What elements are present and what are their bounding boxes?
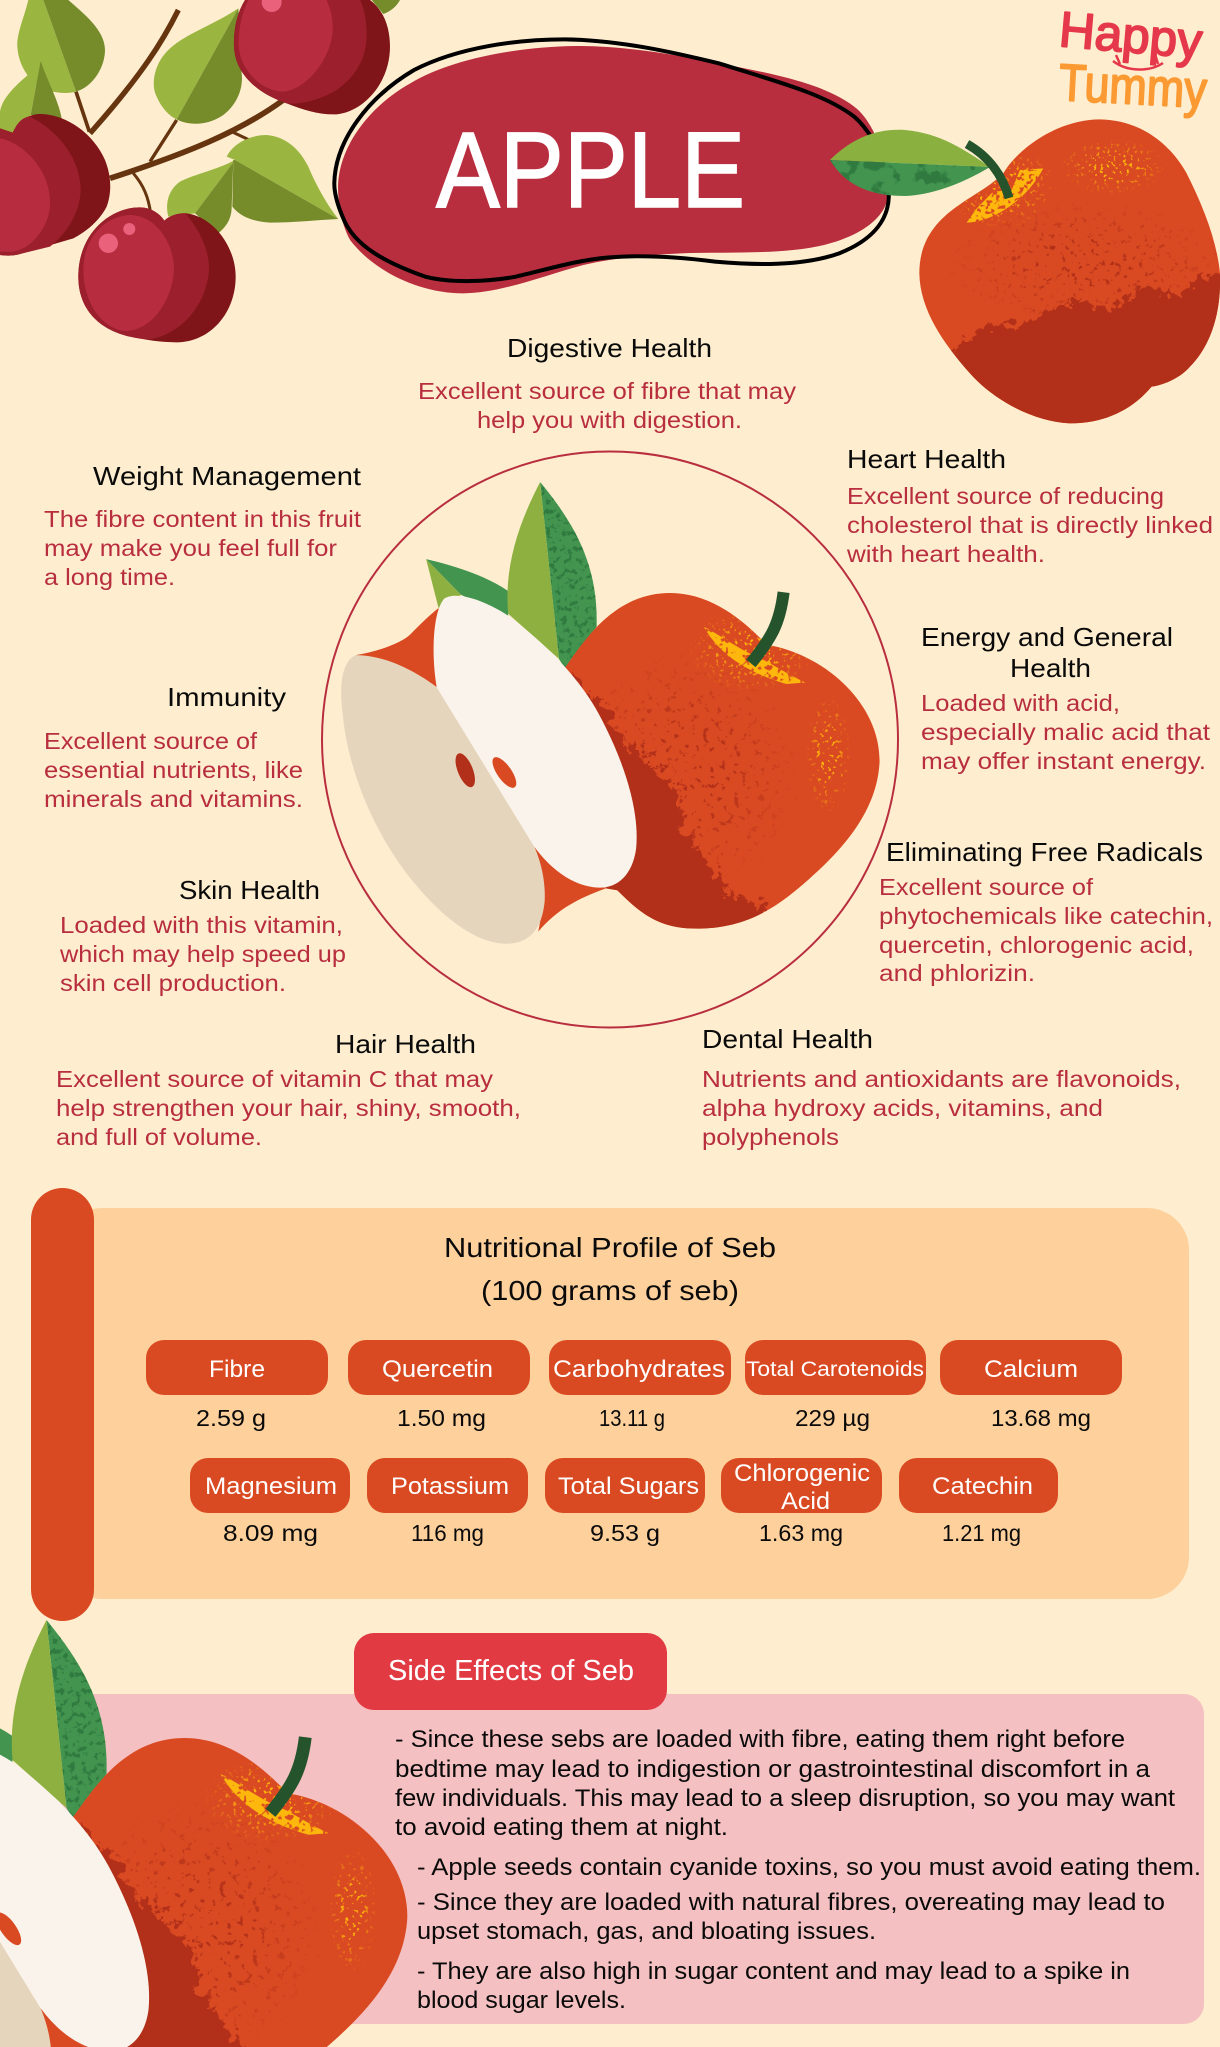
benefit: dental health: Nutrients and antioxidants are flavonoids, xyxy=(702,1066,1181,1092)
side effect: sugar spike: blood sugar levels. xyxy=(417,1987,626,2014)
flesh wedges xyxy=(356,608,606,932)
nutrient: total carotenoids: Total Carotenoids xyxy=(746,1357,924,1381)
benefit: eliminating free radicals: and phlorizin. xyxy=(879,960,1035,986)
benefit: immunity: Immunity xyxy=(167,682,286,712)
nutrient: total sugars: Total Sugars xyxy=(558,1473,699,1500)
nutrient: calcium: Calcium xyxy=(984,1356,1078,1383)
side effect: overeating xyxy=(417,1889,1165,1945)
benefit: digestive health: Digestive Health xyxy=(507,333,712,363)
apple: centre illustration xyxy=(341,482,880,954)
benefit: skin health: Skin Health xyxy=(179,875,320,905)
stem xyxy=(967,144,1009,198)
benefit: eliminating free radicals xyxy=(879,837,1213,986)
nutrient: carbohydrates: Carbohydrates xyxy=(553,1356,725,1383)
accent bar xyxy=(31,1188,94,1621)
nutrient: calcium: 13.68 mg xyxy=(991,1405,1091,1431)
seeds xyxy=(452,751,521,791)
circle frame xyxy=(322,452,898,1028)
leaf: far left xyxy=(0,61,62,133)
benefit: hair health xyxy=(56,1029,521,1150)
benefit: weight management: Weight Management xyxy=(93,461,362,491)
nutrient: total sugars: 9.53 g xyxy=(590,1520,660,1546)
side effect: sleep disruption: to avoid eating them at night. xyxy=(395,1814,728,1841)
benefit: eliminating free radicals: Excellent source of xyxy=(879,874,1094,900)
leaf: lower right of pair xyxy=(227,135,338,223)
leaf: top right sliver xyxy=(372,0,400,14)
benefit: weight management: The fibre content in this fruit xyxy=(44,506,362,532)
heading xyxy=(444,1232,776,1306)
benefit: digestive health xyxy=(418,333,796,433)
benefit: skin health: Loaded with this vitamin, xyxy=(60,912,343,938)
nutrient: chlorogenic acid xyxy=(721,1458,882,1546)
benefit: skin health: which may help speed up xyxy=(59,941,346,967)
nutrient: total carotenoids: 229 µg xyxy=(795,1405,870,1431)
benefit: digestive health: help you with digestion. xyxy=(477,407,742,433)
side effects tag xyxy=(354,1633,667,1710)
benefit: dental health xyxy=(702,1024,1181,1150)
benefit: energy and general health xyxy=(921,622,1211,774)
nutrient: calcium xyxy=(940,1340,1122,1431)
benefit: energy and general health: Loaded with acid, xyxy=(921,690,1120,716)
benefit: energy and general health: especially malic acid that xyxy=(921,719,1211,745)
side effect: sugar spike xyxy=(417,1958,1130,2014)
side effect: sleep disruption xyxy=(395,1726,1175,1841)
logo: Happy Tummy xyxy=(1057,1,1208,120)
nutrient: fibre xyxy=(146,1340,328,1431)
benefit: weight management: a long time. xyxy=(44,564,175,590)
nutrient: quercetin xyxy=(348,1340,530,1431)
benefit: energy and general health: Energy and General xyxy=(921,622,1173,652)
benefit: weight management: may make you feel full for xyxy=(44,535,337,561)
benefit: dental health: alpha hydroxy acids, vitamins, and xyxy=(702,1095,1103,1121)
cherry: top xyxy=(234,0,390,114)
nutrient: quercetin: 1.50 mg xyxy=(397,1405,486,1431)
nutrient: magnesium: 8.09 mg xyxy=(223,1520,318,1546)
side effect: sleep disruption: - Since these sebs are loaded with fibre, eating them right before xyxy=(395,1726,1125,1753)
benefit: hair health: help strengthen your hair, shiny, smooth, xyxy=(56,1095,521,1121)
benefit: digestive health: Excellent source of fibre that may xyxy=(418,378,796,404)
title blob xyxy=(334,39,889,293)
half: white face xyxy=(434,596,637,888)
logo: Happy Tummy: Happy xyxy=(1057,1,1204,69)
leaf xyxy=(830,130,990,196)
benefit: skin health: skin cell production. xyxy=(60,970,286,996)
cherry: left xyxy=(0,114,110,256)
leaf: centre xyxy=(154,8,242,124)
nutrient: potassium: Potassium xyxy=(391,1473,509,1500)
half: cream face xyxy=(341,655,545,944)
apple: top right with leaf xyxy=(830,119,1220,440)
nutrient: fibre: Fibre xyxy=(209,1356,265,1383)
benefit: hair health: Hair Health xyxy=(335,1029,476,1059)
benefit: energy and general health: may offer instant energy. xyxy=(921,748,1206,774)
panel: benefits around apple xyxy=(44,333,1213,1150)
stem xyxy=(751,592,784,663)
side effect: sleep disruption: few individuals. This may lead to a sleep disruption, so you may want xyxy=(395,1785,1175,1812)
title: APPLE xyxy=(436,109,745,230)
benefit: hair health: and full of volume. xyxy=(56,1124,262,1150)
benefit: heart health: Heart Health xyxy=(847,444,1006,474)
side effect: cyanide: - Apple seeds contain cyanide toxins, so you must avoid eating them. xyxy=(417,1854,1201,1881)
side effect: sleep disruption: bedtime may lead to indigestion or gastrointestinal discomfort in a xyxy=(395,1756,1151,1783)
nutrient: potassium: 116 mg xyxy=(411,1520,484,1546)
benefit: immunity: Excellent source of xyxy=(44,728,258,754)
benefit: hair health: Excellent source of vitamin C that may xyxy=(56,1066,493,1092)
nutrient: chlorogenic acid: 1.63 mg xyxy=(759,1520,843,1546)
benefit: immunity xyxy=(44,682,303,812)
nutrient: magnesium xyxy=(190,1458,350,1546)
branch with cherries and leaves xyxy=(0,0,400,342)
benefit: heart health: Excellent source of reducing xyxy=(847,483,1164,509)
benefit: eliminating free radicals: phytochemicals like catechin, xyxy=(879,903,1213,929)
benefit: dental health: polyphenols xyxy=(702,1124,839,1150)
nutrient: potassium xyxy=(367,1458,528,1546)
nutrient: total carotenoids xyxy=(745,1340,926,1431)
benefit: immunity: essential nutrients, like xyxy=(44,757,303,783)
side effect: overeating: - Since they are loaded with natural fibres, overeating may lead to xyxy=(417,1889,1165,1916)
nutrient: quercetin: Quercetin xyxy=(382,1356,493,1383)
side effects tag: Side Effects of Seb xyxy=(388,1655,634,1687)
benefit: eliminating free radicals: Eliminating Free Radicals xyxy=(886,837,1203,867)
nutrient: carbohydrates xyxy=(549,1340,731,1431)
benefit: weight management xyxy=(44,461,362,590)
benefit: heart health: cholesterol that is directly linked xyxy=(847,512,1213,538)
nutrient: catechin: 1.21 mg xyxy=(942,1520,1021,1546)
nutrient: chlorogenic acid: Acid xyxy=(781,1488,830,1515)
benefit: eliminating free radicals: quercetin, chlorogenic acid, xyxy=(879,932,1194,958)
nutrient: fibre: 2.59 g xyxy=(196,1405,266,1431)
branch stems xyxy=(0,10,283,223)
benefit: heart health: with heart health. xyxy=(846,541,1045,567)
heading: (100 grams of seb) xyxy=(481,1275,739,1306)
benefit: heart health xyxy=(846,444,1213,567)
benefit: immunity: minerals and vitamins. xyxy=(44,786,303,812)
apple body xyxy=(531,593,880,954)
benefit: dental health: Dental Health xyxy=(702,1024,873,1054)
cherry: bottom xyxy=(78,207,236,342)
nutrient: carbohydrates: 13.11 g xyxy=(599,1405,665,1431)
nutrient: magnesium: Magnesium xyxy=(205,1473,337,1500)
leaf: lower left of pair xyxy=(167,160,235,233)
panel: nutritional profile xyxy=(31,1188,1189,1621)
nutrient: catechin: Catechin xyxy=(932,1473,1033,1500)
benefit: skin health xyxy=(59,875,346,996)
nutrient: total sugars xyxy=(545,1458,705,1546)
nutrient: catechin xyxy=(899,1458,1058,1546)
leaf: top left xyxy=(17,0,105,93)
side effect: overeating: upset stomach, gas, and bloating issues. xyxy=(417,1918,876,1945)
benefit: energy and general health: Health xyxy=(1010,653,1091,683)
heading: Nutritional Profile of Seb xyxy=(444,1232,776,1263)
leaves xyxy=(426,482,597,668)
side effect: sugar spike: - They are also high in sugar content and may lead to a spike in xyxy=(417,1958,1130,1985)
panel: side effects xyxy=(60,1633,1204,2024)
nutrient: chlorogenic acid: Chlorogenic xyxy=(734,1460,870,1487)
apple: bottom left illustration xyxy=(0,1620,407,2047)
